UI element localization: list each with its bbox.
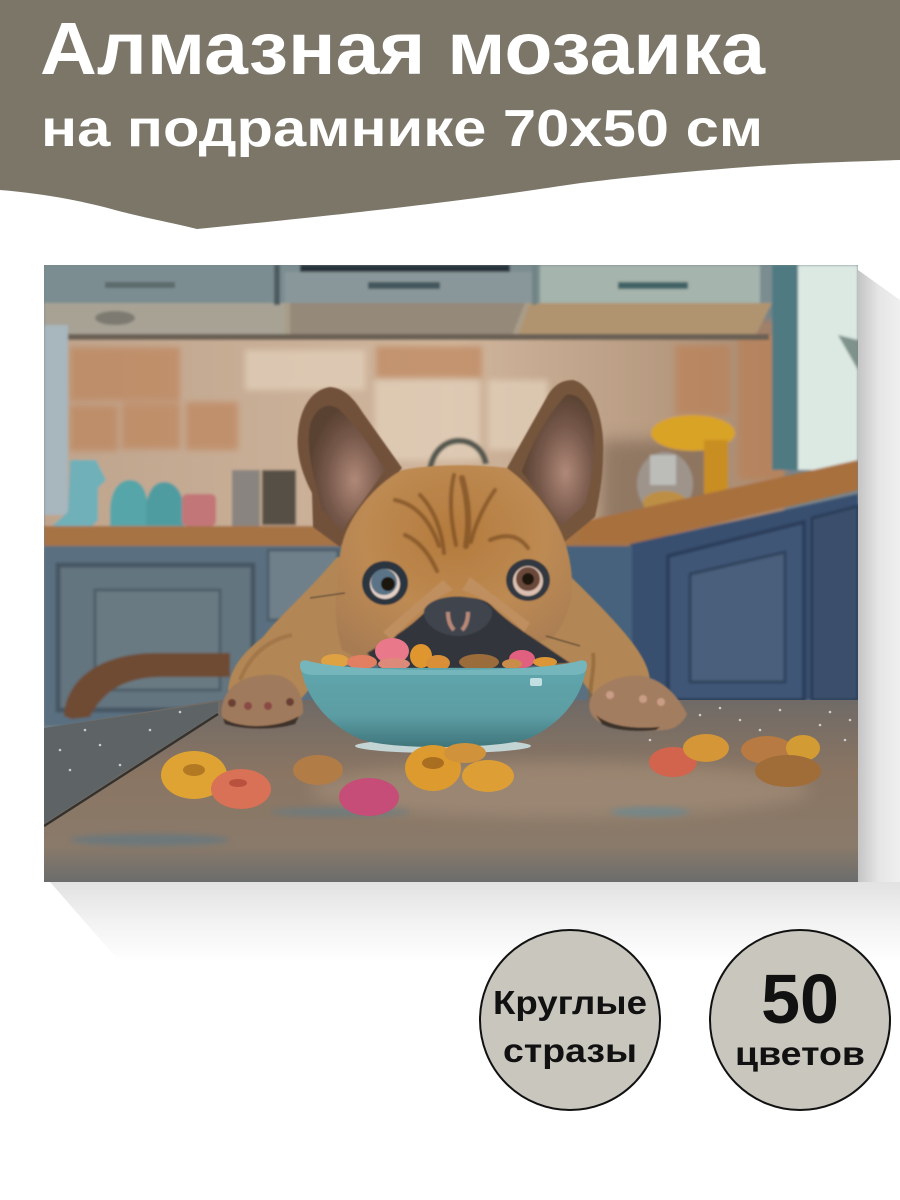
head bbox=[336, 465, 572, 665]
food in bowl bbox=[321, 638, 557, 671]
muzzle and nose bbox=[367, 577, 570, 668]
badge: round rhinestones: стразы bbox=[503, 1032, 637, 1069]
chair bbox=[64, 653, 230, 719]
wrinkles bbox=[395, 475, 528, 571]
badge: round rhinestones: Круглые bbox=[493, 984, 647, 1021]
dog body and arms bbox=[228, 557, 650, 705]
wall tiles bbox=[44, 320, 786, 535]
countertop bbox=[44, 460, 858, 546]
bowl bbox=[300, 660, 587, 753]
badge: 50 colours bbox=[710, 930, 890, 1110]
table cereal pieces bbox=[161, 734, 821, 816]
canvas picture: dog with bowl in kitchen bbox=[44, 265, 858, 882]
whiskers bbox=[310, 593, 580, 646]
badge: round rhinestones bbox=[480, 930, 660, 1110]
counter items bbox=[52, 441, 486, 526]
right ear bbox=[507, 380, 603, 543]
header banner bbox=[0, 0, 900, 229]
badge: 50 colours: цветов bbox=[735, 1035, 865, 1072]
lower cabinets bbox=[44, 494, 858, 726]
window bbox=[44, 265, 858, 515]
left ear bbox=[298, 387, 402, 547]
upper cabinets bbox=[44, 265, 784, 340]
title: Алмазная мозаика bbox=[40, 7, 766, 90]
eyes bbox=[362, 559, 550, 605]
left paw bbox=[222, 675, 303, 728]
badge: 50 colours: 50 bbox=[761, 960, 839, 1038]
subtitle: на подрамнике 70х50 см bbox=[41, 100, 763, 158]
yellow mixer bbox=[637, 415, 735, 516]
blurred kitchen background bbox=[44, 265, 858, 726]
dog bbox=[222, 380, 687, 731]
canvas shadow bbox=[50, 270, 900, 962]
table bbox=[44, 700, 858, 882]
right paw bbox=[589, 675, 687, 731]
